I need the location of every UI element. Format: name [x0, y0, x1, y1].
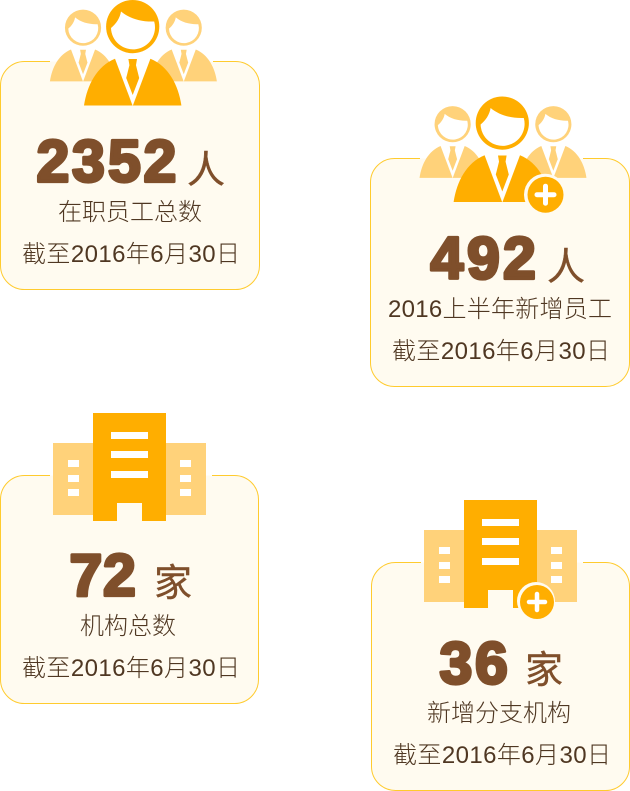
number: 72: 72 — [70, 542, 136, 608]
label: total employees: 在职员工总数 — [58, 199, 202, 226]
icon: buildings with plus — [424, 500, 577, 620]
date: 截至2016年6月30日 — [393, 742, 611, 769]
date: 截至2016年6月30日 — [22, 655, 240, 682]
number: 36: 36 — [440, 630, 508, 696]
number: 492: 492 — [430, 226, 536, 292]
label: total branches: 机构总数 — [80, 613, 176, 640]
unit: branches: 家 — [154, 563, 192, 605]
number: 2352: 2352 — [36, 128, 176, 194]
unit: people: 人 — [187, 150, 225, 192]
panel: new branches — [372, 500, 630, 790]
date: 截至2016年6月30日 — [392, 338, 610, 365]
panel: total branches — [0, 413, 258, 704]
unit: people: 人 — [547, 247, 585, 289]
date: 截至2016年6月30日 — [22, 241, 240, 268]
panel: total employees — [0, 0, 260, 290]
icon: three people — [50, 0, 217, 106]
panel: new employees — [370, 96, 630, 386]
icon: three people with plus — [420, 96, 586, 216]
label: new employees: 2016上半年新增员工 — [388, 296, 612, 323]
icon: buildings — [53, 413, 206, 521]
unit: branches: 家 — [525, 650, 563, 692]
label: new branches: 新增分支机构 — [427, 700, 571, 727]
